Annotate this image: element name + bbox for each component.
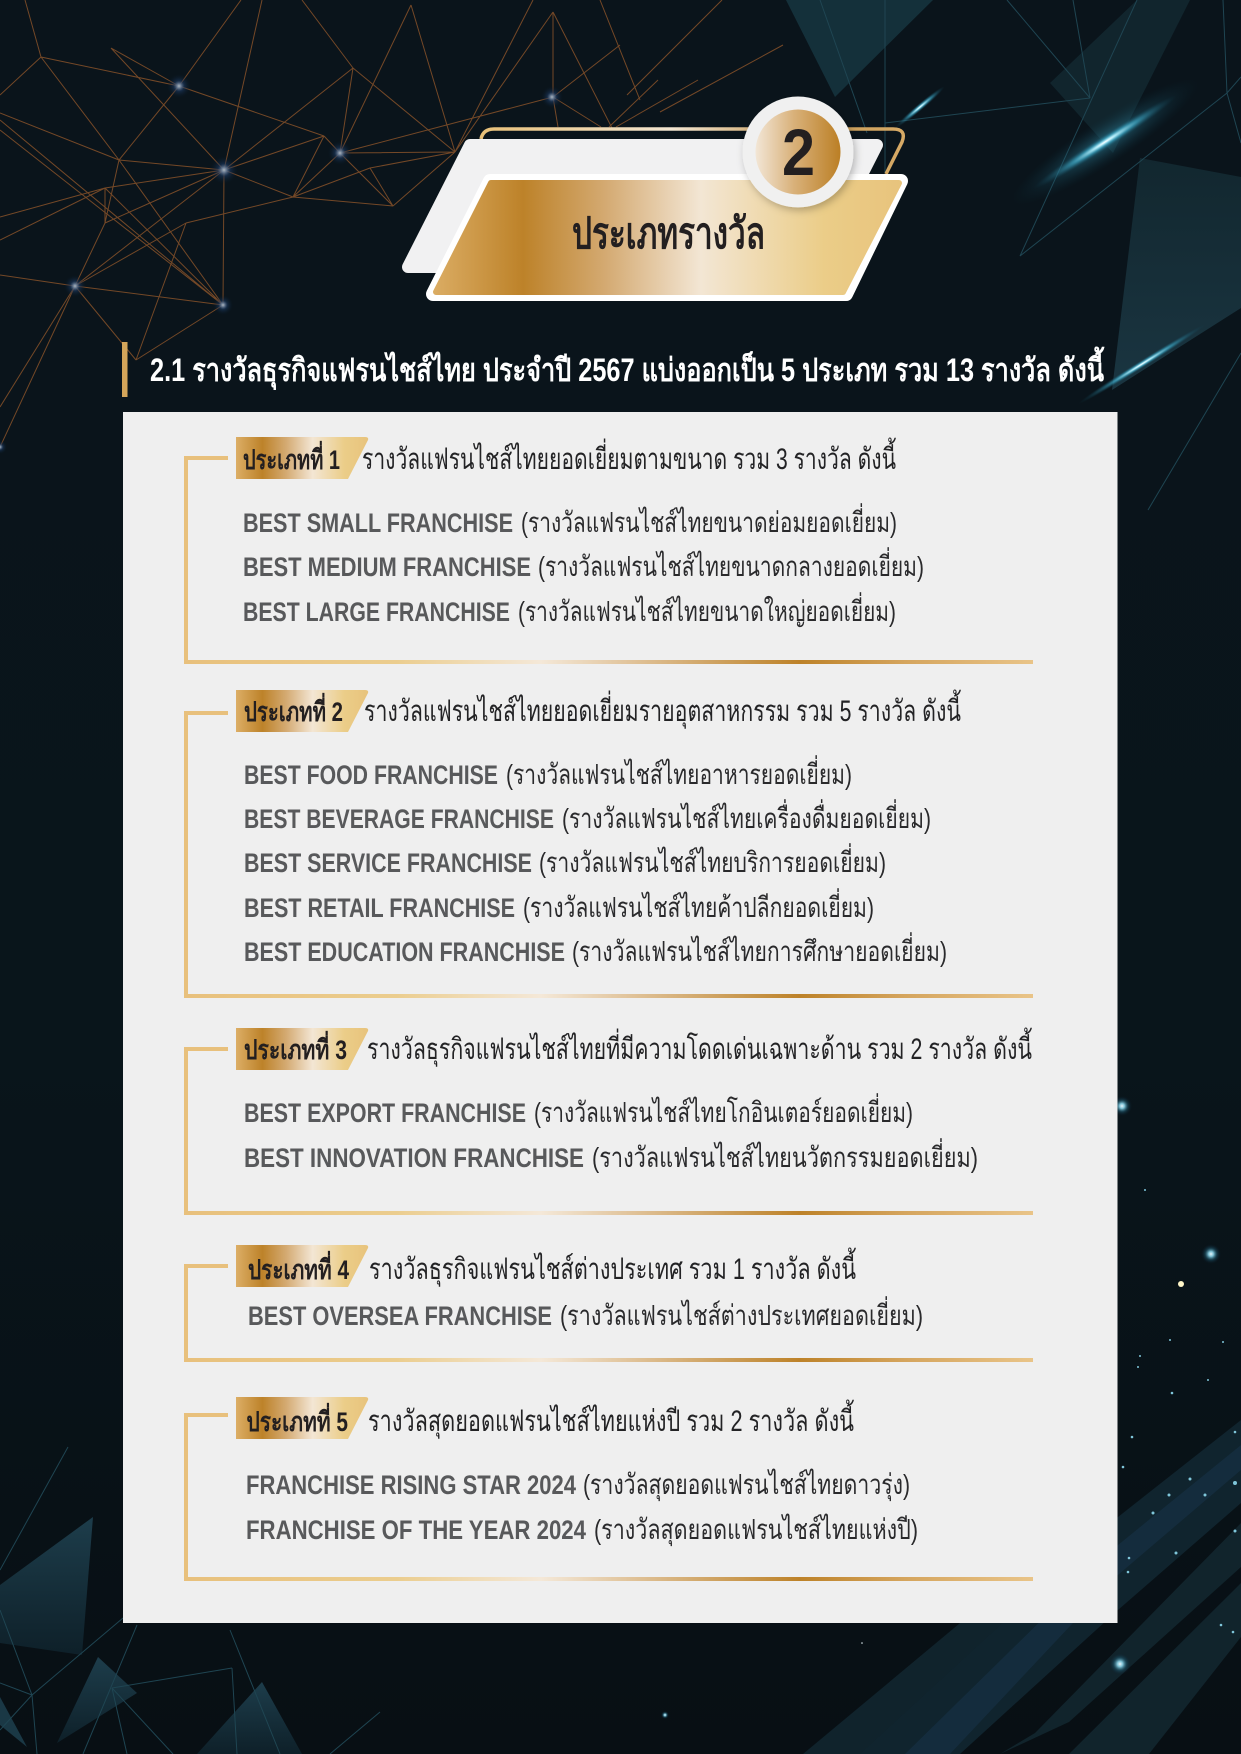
- category 2: BEST RETAIL FRANCHISE: [244, 893, 515, 923]
- badge gold outline: [481, 129, 903, 174]
- category 1: ประเภทที่ 1: [243, 440, 340, 475]
- light flares: [893, 64, 1209, 407]
- number circle: [742, 96, 854, 208]
- category 3: ประเภทที่ 3: [244, 1030, 347, 1065]
- category 2: (รางวัลแฟรนไชส์ไทยเครื่องดื่มยอดเยี่ยม): [562, 799, 931, 834]
- category 1: (รางวัลแฟรนไชส์ไทยขนาดใหญ่ยอดเยี่ยม): [518, 592, 896, 627]
- category 4: [184, 1245, 1033, 1362]
- category 1: BEST MEDIUM FRANCHISE: [243, 552, 531, 582]
- category 5: [184, 1397, 1033, 1581]
- teal polygons bottom left: [0, 1447, 380, 1754]
- category 4: BEST OVERSEA FRANCHISE: [248, 1301, 552, 1331]
- category 5: ประเภทที่ 5: [246, 1402, 348, 1437]
- badge white border: [433, 181, 901, 294]
- category 5: FRANCHISE RISING STAR 2024: [246, 1470, 576, 1500]
- category 5: (รางวัลสุดยอดแฟรนไชส์ไทยแห่งปี): [594, 1514, 918, 1547]
- category 3: [184, 1028, 1033, 1215]
- star glows: [0, 74, 563, 454]
- category 4: รางวัลธุรกิจแฟรนไชส์ต่างประเทศ รวม 1 รางวัล ดังนี้: [369, 1248, 856, 1287]
- category 3: (รางวัลแฟรนไชส์ไทยโกอินเตอร์ยอดเยี่ยม): [534, 1093, 913, 1128]
- category 5: รางวัลสุดยอดแฟรนไชส์ไทยแห่งปี รวม 2 รางวัล ดังนี้: [368, 1400, 854, 1439]
- badge: section number and title: [408, 96, 903, 294]
- category 1: BEST SMALL FRANCHISE: [243, 508, 513, 538]
- category 1: (รางวัลแฟรนไชส์ไทยขนาดย่อมยอดเยี่ยม): [521, 503, 897, 538]
- category 2: [184, 690, 1033, 998]
- badge gold plate: [436, 183, 899, 292]
- category 2: (รางวัลแฟรนไชส์ไทยการศึกษายอดเยี่ยม): [572, 932, 947, 967]
- category 2: BEST FOOD FRANCHISE: [244, 760, 498, 790]
- category 1: BEST LARGE FRANCHISE: [243, 597, 510, 627]
- diagonal stripes bottom right: [803, 1420, 1241, 1754]
- category 3: BEST EXPORT FRANCHISE: [244, 1098, 526, 1128]
- category 5: FRANCHISE OF THE YEAR 2024: [246, 1515, 586, 1545]
- category 2: รางวัลแฟรนไชส์ไทยยอดเยี่ยมรายอุตสาหกรรม รวม 5 รางวัล ดังนี้: [364, 690, 961, 729]
- category 5: (รางวัลสุดยอดแฟรนไชส์ไทยดาวรุ่ง): [583, 1469, 910, 1502]
- category 4: ประเภทที่ 4: [248, 1250, 349, 1285]
- category 2: BEST BEVERAGE FRANCHISE: [244, 804, 554, 834]
- category 3: BEST INNOVATION FRANCHISE: [244, 1143, 584, 1173]
- category 2: (รางวัลแฟรนไชส์ไทยค้าปลีกยอดเยี่ยม): [523, 888, 874, 923]
- section heading: [122, 342, 1105, 397]
- category 2: (รางวัลแฟรนไชส์ไทยอาหารยอดเยี่ยม): [506, 755, 852, 790]
- orange constellation network: [0, 0, 783, 447]
- badge grey backing shape: [408, 145, 877, 267]
- category 1: [184, 437, 1033, 664]
- category 4: (รางวัลแฟรนไชส์ต่างประเทศยอดเยี่ยม): [560, 1296, 923, 1331]
- category 1: รางวัลแฟรนไชส์ไทยยอดเยี่ยมตามขนาด รวม 3 รางวัล ดังนี้: [362, 438, 896, 476]
- number circle: 2: [782, 115, 815, 189]
- category 2: ประเภทที่ 2: [244, 692, 343, 727]
- category 3: (รางวัลแฟรนไชส์ไทยนวัตกรรมยอดเยี่ยม): [592, 1138, 978, 1173]
- starfield: [661, 1096, 1237, 1719]
- category 2: BEST EDUCATION FRANCHISE: [244, 937, 565, 967]
- teal polygons top right: [786, 0, 1241, 510]
- badge title: ประเภทรางวัล: [572, 210, 765, 258]
- category 1: (รางวัลแฟรนไชส์ไทยขนาดกลางยอดเยี่ยม): [538, 547, 924, 582]
- category 2: BEST SERVICE FRANCHISE: [244, 848, 532, 878]
- category 2: (รางวัลแฟรนไชส์ไทยบริการยอดเยี่ยม): [539, 843, 886, 878]
- panel: award list: [123, 412, 1118, 1623]
